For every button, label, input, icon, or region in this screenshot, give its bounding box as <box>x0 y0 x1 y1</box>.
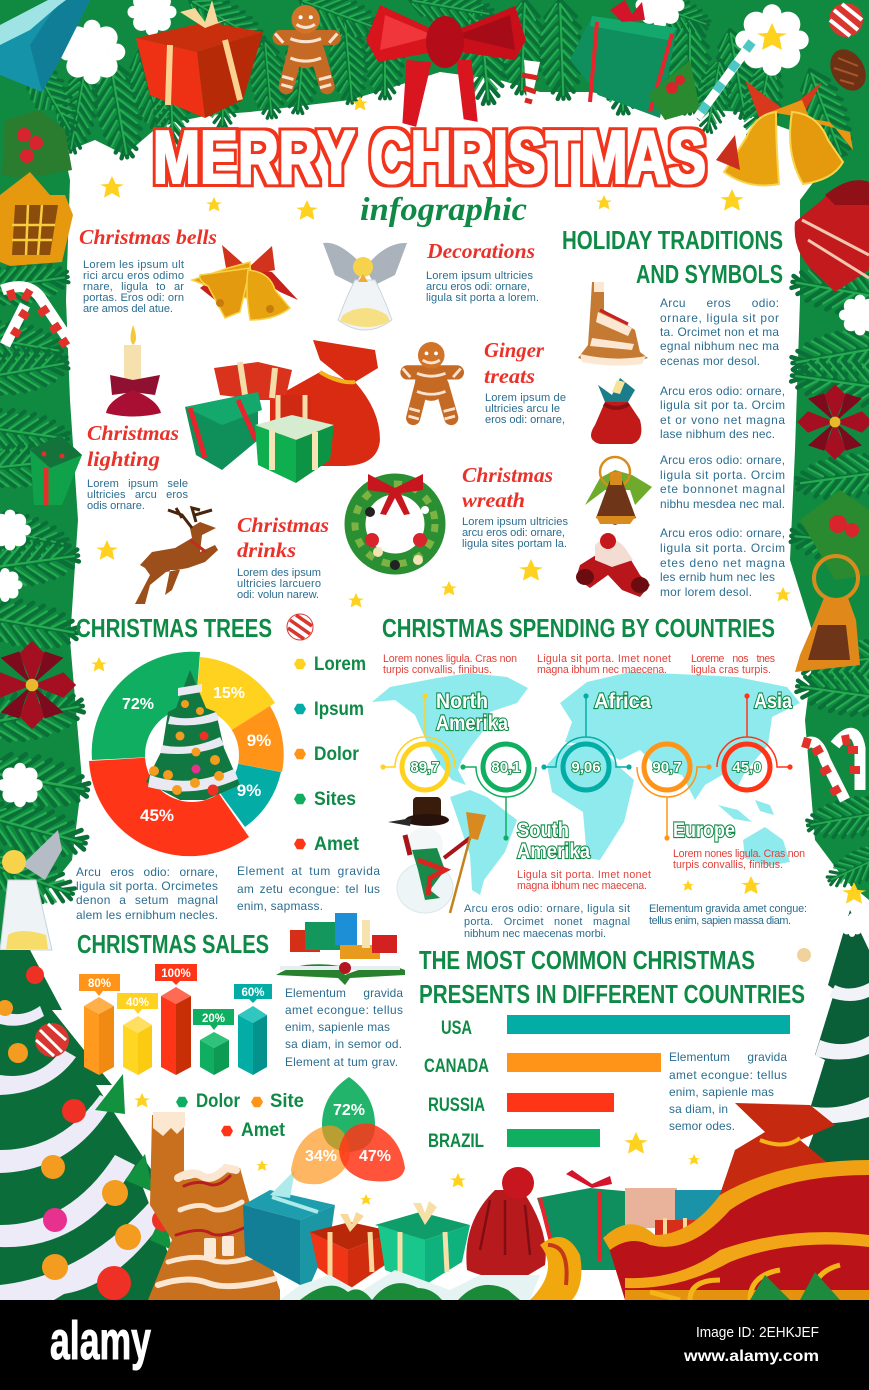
icon: cookie <box>797 948 811 962</box>
block: Christmas wreath: arcu eros odi: ornare, <box>462 527 565 539</box>
icon: striped ornament <box>829 3 863 37</box>
block: Christmas lighting <box>87 421 188 512</box>
map captions: magna ibhum nec maecena. <box>537 664 667 676</box>
pie text left: alem les ernibhum necles. <box>76 908 218 922</box>
pie text right <box>237 864 380 913</box>
icon: candy stick top <box>522 60 540 116</box>
icon: gifts and sack <box>185 340 380 483</box>
block: Christmas lighting: lighting <box>87 447 160 471</box>
map labels: Asia <box>754 690 792 713</box>
heading: holiday traditions: AND SYMBOLS <box>636 259 783 289</box>
icon: gingerbread top <box>275 5 337 88</box>
icon: green gift top <box>570 0 677 118</box>
block: Christmas wreath: Lorem ipsum ultricies <box>462 516 568 528</box>
block: Christmas lighting: Christmas <box>87 421 179 445</box>
tradition 4 icon: mittens <box>576 533 650 597</box>
map text right: Elementum gravida amet congue: <box>649 903 807 915</box>
icon: title stars <box>91 96 866 1205</box>
tradition 4 text: ligula sit porta. Orcim <box>660 541 785 555</box>
icon: holly right <box>800 490 869 580</box>
presents text <box>669 1050 787 1133</box>
pie text left: ligula sit porta. Orcimetes <box>76 879 218 893</box>
icon: ornament <box>287 614 313 640</box>
bar: 20%: 20% <box>202 1013 225 1025</box>
block: Christmas bells: rnare, ligula to ar <box>83 281 184 293</box>
icon: sack bottom right <box>718 1103 838 1200</box>
ring: South Amerika <box>460 744 536 841</box>
tradition 3 text: ligula sit porta. Orcim <box>660 468 785 482</box>
block: Christmas bells: rici arcu eros odimo <box>83 270 184 282</box>
slice: orange 9% <box>192 706 284 772</box>
icon: snowman <box>388 797 486 913</box>
footer band <box>0 1300 869 1390</box>
bar: 60% <box>234 984 272 1075</box>
pie text right: enim, sapmass. <box>237 899 323 913</box>
tradition 1 icon: gingerbread house <box>578 282 648 366</box>
subtitle: infographic <box>360 192 527 228</box>
row: Russia: RUSSIA <box>428 1095 485 1116</box>
ring values: 80,1 <box>491 759 521 776</box>
icon: candy canes right <box>800 733 860 800</box>
map text left: porta. Orcimet nonet magnal <box>464 916 630 928</box>
heading: most common presents <box>419 945 805 1009</box>
map captions <box>383 653 805 892</box>
map captions: Loreme nos tnes <box>691 653 775 665</box>
logo: alamy: alamy <box>50 1311 151 1371</box>
tradition 2 text: lase nibhum des nec. <box>660 427 775 441</box>
tradition 2 text: ligula sit por ta. Orcim <box>660 398 785 412</box>
snow on garland <box>0 0 869 807</box>
bar: 40%: 40% <box>126 997 149 1009</box>
block: Ginger treats: treats <box>484 364 535 388</box>
tradition 3 text <box>660 453 785 511</box>
bar: 80%: 80% <box>88 978 111 990</box>
pie legend: Amet <box>314 834 360 855</box>
slice values: 45% <box>140 806 174 825</box>
icon: green gift left <box>30 435 82 505</box>
icon: angel left <box>0 830 62 950</box>
icon: reindeer <box>135 508 218 604</box>
map labels: Europe <box>673 819 735 842</box>
presents text: sa diam, in <box>669 1102 728 1116</box>
pie legend <box>294 654 366 855</box>
row: Russia <box>428 1093 614 1116</box>
tradition 4 text: etes deno net magna <box>660 556 785 570</box>
sleigh <box>530 1160 869 1300</box>
tradition 2 text: Arcu eros odio: ornare, <box>660 384 785 398</box>
map labels: South <box>517 819 569 842</box>
block: Christmas lighting: odis ornare. <box>87 500 145 512</box>
icon: gingerbread house bottom <box>148 1112 280 1300</box>
heading: Christmas sales: CHRISTMAS SALES <box>77 929 269 959</box>
tradition 4 text: mor lorem desol. <box>660 585 752 599</box>
ring values: 45,0 <box>732 759 762 776</box>
donut chart <box>89 652 284 856</box>
block: Christmas wreath: wreath <box>462 488 525 512</box>
block: Christmas bells: are amos del atue. <box>83 303 173 315</box>
title: MERRY CHRISTMAS <box>153 115 706 199</box>
icon: green gift bottom <box>375 1201 470 1285</box>
slice: green 72% <box>92 652 200 760</box>
map captions: Lorem nones ligula. Cras non <box>383 653 517 665</box>
row: Brazil: BRAZIL <box>428 1131 484 1152</box>
block: Christmas bells <box>79 225 217 315</box>
icon: red bow top <box>366 5 526 125</box>
block: Ginger treats: eros odi: ornare, <box>485 414 565 426</box>
pie legend: Sites <box>314 789 356 810</box>
tradition 2 icon: gift sack <box>591 378 641 444</box>
icon: green gift behind sleigh <box>537 1170 635 1270</box>
tradition 3 text: nibhu mesdea nec mal. <box>660 497 785 511</box>
tradition 4 text: Arcu eros odio: ornare, <box>660 526 785 540</box>
tradition 3 text: ete bonnonet magnal <box>660 482 785 496</box>
venn diagram: 47% <box>359 1148 391 1165</box>
bar: 20% <box>193 1009 234 1075</box>
presents text: amet econgue: tellus <box>669 1068 787 1082</box>
icon: candy stripe <box>697 38 755 118</box>
block: Christmas bells: Christmas bells <box>79 225 217 249</box>
block: Christmas bells: Lorem les ipsum ult <box>83 259 184 271</box>
tradition 2 text: et or vono net magna <box>660 413 785 427</box>
world map <box>372 672 800 895</box>
slice: yellow 15% <box>192 657 275 755</box>
pie legend: Lorem <box>314 654 366 675</box>
ring: Asia <box>717 693 793 790</box>
icon: lantern right <box>795 556 860 672</box>
block: Christmas drinks: Lorem des ipsum <box>237 567 321 579</box>
icon: candle <box>106 325 161 416</box>
icon: red gift bottom <box>310 1212 395 1290</box>
block: Decorations: Decorations <box>426 239 535 263</box>
icon: poinsettia left <box>0 641 76 729</box>
block: Ginger treats: Lorem ipsum de <box>485 392 566 404</box>
pie text left: denon a setum magnal <box>76 893 218 907</box>
icon: Christmas tree <box>146 670 240 800</box>
slice values: 9% <box>247 731 271 750</box>
block: Ginger treats: Ginger <box>484 338 545 362</box>
presents text: enim, sapienle mas <box>669 1085 774 1099</box>
Christmas tree right <box>799 910 869 1170</box>
row: Canada <box>424 1053 661 1077</box>
bar chart: sales <box>79 964 272 1075</box>
website: www.alamy.com <box>683 1348 819 1365</box>
venn diagram <box>291 1077 405 1184</box>
bar chart: presents <box>424 1015 790 1152</box>
infographic rings <box>380 693 793 841</box>
pie legend: Dolor <box>314 744 360 765</box>
map text right: tellus enim, sapien massa diam. <box>649 915 791 927</box>
big Christmas tree bottom left <box>0 950 186 1300</box>
map text left: nibhum nec maecenas morbi. <box>464 928 606 940</box>
garland: left border <box>0 110 92 960</box>
block: Ginger treats <box>484 338 566 426</box>
sales text: amet econgue: tellus <box>285 1003 403 1017</box>
map text left <box>464 903 630 940</box>
bar: 80% <box>79 974 120 1075</box>
map captions: Ligula sit porta. Imet nonet <box>517 869 651 881</box>
slice values <box>122 685 271 825</box>
block: Decorations: ligula sit porta a lorem. <box>426 292 539 304</box>
map labels: Africa <box>594 690 651 713</box>
pie text left <box>76 865 218 922</box>
ring: Europe <box>637 744 712 841</box>
block: Decorations: arcu eros odi: ornare, <box>426 281 530 293</box>
icon: pinecone <box>823 43 869 97</box>
tradition 4 text: les ernib hum nec les <box>660 570 775 584</box>
bar: 100%: 100% <box>161 968 191 980</box>
heading: holiday traditions: HOLIDAY TRADITIONS <box>562 225 783 255</box>
map labels: Amerika <box>436 712 508 735</box>
icon: teal gift bottom <box>243 1170 335 1285</box>
icon: knit hat <box>466 1167 546 1280</box>
icons: gifts in sleigh <box>625 1188 737 1255</box>
tradition 2 text <box>660 384 785 441</box>
ring values <box>410 759 762 776</box>
map text right <box>649 903 807 927</box>
slice values: 72% <box>122 696 154 713</box>
map labels <box>436 690 792 863</box>
slice: red 45% <box>89 755 249 856</box>
sales legend: Dolor <box>196 1091 241 1112</box>
icon: holly and lantern top left <box>0 110 73 266</box>
map captions: ligula cras turpis. <box>691 664 771 676</box>
tradition 1 text: ecenas mor desol. <box>660 354 760 368</box>
slice values: 15% <box>213 685 245 702</box>
icon: gift pile garland <box>276 913 405 985</box>
block: Christmas wreath <box>462 463 568 550</box>
map captions: magna ibhum nec maecena. <box>517 880 647 892</box>
slice values: 9% <box>237 781 261 800</box>
map labels: North <box>436 690 488 713</box>
heading: spending: CHRISTMAS SPENDING BY COUNTRIES <box>382 613 775 643</box>
block: Decorations <box>426 239 539 304</box>
sales text <box>285 986 403 1069</box>
tradition 1 text: ta. Orcimet non et ma <box>660 325 779 339</box>
row: USA: USA <box>441 1018 472 1039</box>
heading: Christmas trees: CHRISTMAS TREES <box>76 613 272 643</box>
icon: wreath <box>355 474 435 570</box>
block: Christmas drinks <box>237 513 329 601</box>
image id: Image ID: 2EHKJEF <box>696 1324 819 1341</box>
heading: holiday traditions <box>562 225 783 289</box>
row: USA <box>441 1015 790 1039</box>
block: Decorations: Lorem ipsum ultricies <box>426 270 533 282</box>
icon: star on snow <box>757 23 787 50</box>
presents text: Elementum gravida <box>669 1050 787 1064</box>
block: Christmas drinks: Christmas <box>237 513 329 537</box>
ring values: 9,06 <box>571 759 601 776</box>
sales text: enim, sapienle mas <box>285 1020 390 1034</box>
ring: Africa <box>541 693 632 790</box>
pie text left: Arcu eros odio: ornare, <box>76 865 218 879</box>
icon: red gift top <box>136 0 263 118</box>
sales text: sa diam, in semor od. <box>285 1037 402 1051</box>
garland: right border <box>789 150 869 900</box>
block: Christmas drinks: ultricies larcuero <box>237 578 321 590</box>
venn diagram: 34% <box>305 1148 337 1165</box>
ring values: 90,7 <box>652 759 682 776</box>
bar: 60%: 60% <box>241 987 265 999</box>
block: Ginger treats: ultricies arcu le <box>485 403 560 415</box>
pie legend: Ipsum <box>314 699 364 720</box>
snow base with greenery <box>280 1270 540 1300</box>
heading: most common presents: THE MOST COMMON CHRISTMAS <box>419 945 755 975</box>
icon: bells <box>192 245 298 320</box>
sales text: Elementum gravida <box>285 986 403 1000</box>
block: Christmas bells: portas. Eros odi: orn <box>83 292 184 304</box>
sales legend <box>176 1091 304 1141</box>
icon: poinsettia right <box>797 384 869 460</box>
sales text: Element at tum grav. <box>285 1055 398 1069</box>
tradition 3 text: Arcu eros odio: ornare, <box>660 453 785 467</box>
icon: holly top <box>648 60 700 120</box>
tradition 3 icon: lantern with holly <box>585 457 652 525</box>
map captions: turpis convallis, finibus. <box>383 664 492 676</box>
block: Christmas drinks: drinks <box>237 538 296 562</box>
bar: 100% <box>155 964 197 1075</box>
venn diagram: 72% <box>333 1102 365 1119</box>
block: Christmas lighting: Lorem ipsum sele <box>87 478 188 490</box>
block: Christmas wreath: ligula sites portam la. <box>462 538 567 550</box>
block: Christmas wreath: Christmas <box>462 463 553 487</box>
ring values: 89,7 <box>410 759 440 776</box>
pie text right: am zetu econgue: tel lus <box>237 882 380 896</box>
tradition 1 text: egnal nibhum nec ma <box>660 339 779 353</box>
bar: 40% <box>117 993 158 1075</box>
map captions: turpis convallis, finibus. <box>673 859 783 871</box>
icon: gingerbread man <box>403 342 461 419</box>
tradition 1 text <box>660 296 779 368</box>
pie text right: Element at tum gravida <box>237 864 380 878</box>
presents text: semor odes. <box>669 1119 735 1133</box>
sales legend: Amet <box>241 1120 286 1141</box>
row: Brazil <box>428 1129 600 1152</box>
icon: angel <box>323 243 407 330</box>
sales legend: Site <box>270 1091 304 1112</box>
icon: red mitten right <box>795 180 869 292</box>
icon: candy cane left <box>2 287 72 345</box>
row: Canada: CANADA <box>424 1056 489 1077</box>
map text left: Arcu eros odio: ornare, ligula sit <box>464 903 630 915</box>
map labels: Amerika <box>517 840 590 863</box>
garland: top border <box>0 0 869 170</box>
ring: North Amerika <box>380 693 455 790</box>
slice: teal 9% <box>192 755 281 827</box>
tradition 1 text: Arcu eros odio: <box>660 296 779 310</box>
block: Christmas drinks: odi: volun narew. <box>237 589 319 601</box>
map captions: Ligula sit porta. Imet nonet <box>537 653 671 665</box>
map captions: Lorem nones ligula. Cras non <box>673 848 805 860</box>
block: Christmas lighting: ultricies arcu eros <box>87 489 188 501</box>
icon: teal gift top left <box>0 0 90 92</box>
tradition 1 text: ornare, ligula sit por <box>660 311 779 325</box>
tradition 4 text <box>660 526 785 599</box>
icon: gold bells top right <box>716 80 853 186</box>
